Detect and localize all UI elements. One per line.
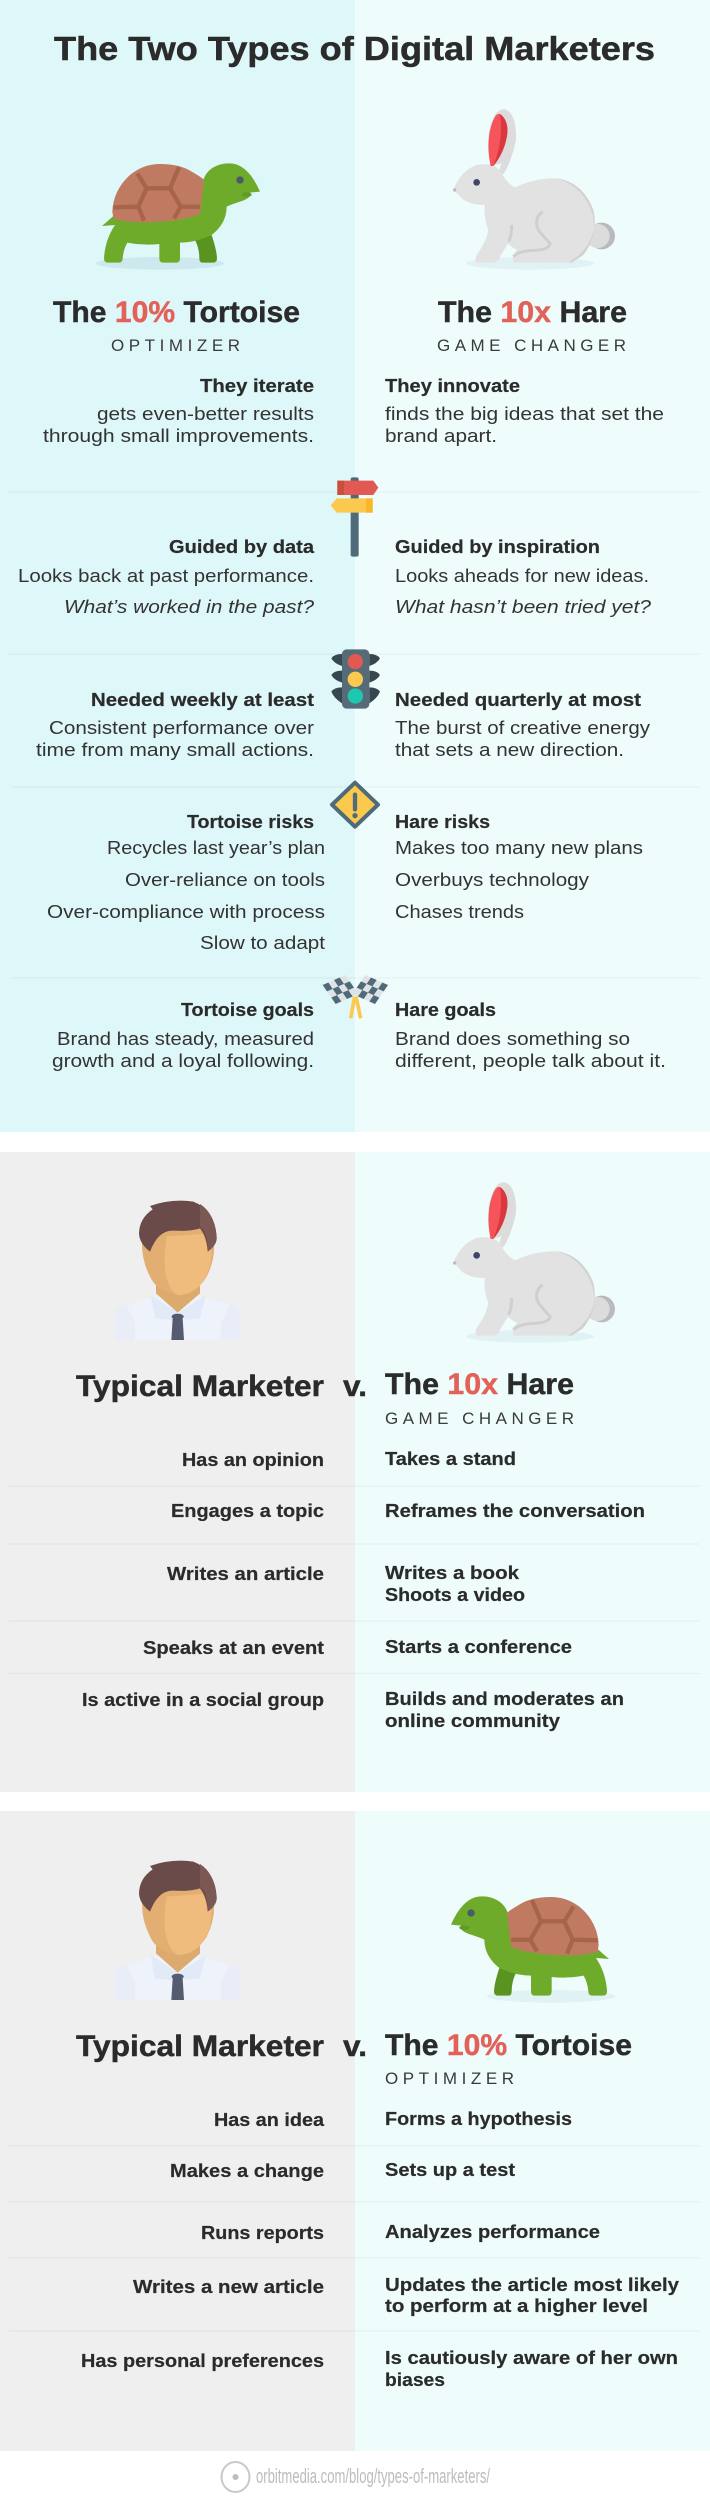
text block: hare goals: Brand does something so [395,1028,630,1049]
icon: hare [453,109,615,270]
text block: guided by inspiration: Guided by inspiration [395,536,600,557]
text block: they iterate: through small improvements. [43,425,314,446]
text block: they iterate: gets even-better results [97,403,314,424]
text block: they innovate [385,375,664,446]
heading: versus: v. [343,1370,367,1403]
list: hare actions: Builds and moderates an [385,1688,624,1709]
text block: needed weekly [36,689,314,760]
subheading: game changer: GAME CHANGER [385,1409,574,1428]
text block: tortoise risks [47,811,325,953]
text block: needed weekly: time from many small actions. [36,739,314,760]
text block: guided by data: Looks back at past performance. [18,565,314,586]
panel background [0,0,710,1132]
text block: tortoise goals: growth and a loyal following. [52,1050,314,1071]
icon: traffic light [331,649,380,709]
list: tortoise actions: Updates the article most likely [385,2274,680,2295]
text block: hare goals: different, people talk about it. [395,1050,666,1071]
list: hare actions: Reframes the conversation [385,1500,645,1521]
panel: tortoise vs hare [0,0,710,1132]
list: marketer actions: Speaks at an event [143,1637,324,1658]
text block: guided by inspiration: Looks aheads for new ideas. [395,565,649,586]
text block: hare goals [395,999,666,1071]
subheading: game changer: GAME CHANGER [437,336,626,355]
text block: hare risks: Makes too many new plans [395,837,643,858]
text block: needed quarterly [395,689,651,760]
text block: they innovate: finds the big ideas that set the [385,403,664,424]
text block: guided by data: What’s worked in the past? [64,596,315,617]
text block: hare risks: Overbuys technology [395,869,590,890]
text block: needed weekly: Consistent performance over [49,717,314,738]
heading: the 10% tortoise: The 10% Tortoise [53,296,300,329]
source text: orbitmedia.com/blog/types-of-marketers/ [256,2466,490,2488]
heading: typical marketer: Typical Marketer [76,2030,324,2063]
text block: tortoise goals [52,999,314,1071]
icon: checkered flags [323,975,388,1018]
text block: needed quarterly: that sets a new direction. [395,739,624,760]
text block: needed quarterly: The burst of creative energy [395,717,651,738]
text block: tortoise goals: Brand has steady, measured [57,1028,314,1049]
text block: needed weekly: Needed weekly at least [91,689,314,710]
panel background [0,1152,710,1792]
text block: tortoise goals: Tortoise goals [181,999,314,1020]
list: tortoise actions: Analyzes performance [385,2221,600,2242]
list: hare actions: Starts a conference [385,1636,572,1657]
icon: tortoise [451,1896,615,2003]
icon: marketer [115,1201,240,1340]
list: marketer actions [81,2109,325,2371]
heading: the 10% tortoise: The 10% Tortoise [385,2029,632,2062]
list: marketer actions: Has personal preferences [81,2350,324,2371]
panel background [0,1811,710,2451]
list: marketer actions [82,1449,324,1710]
icon: orbit logo [222,2462,250,2492]
list: hare actions: Takes a stand [385,1448,516,1469]
text block: needed quarterly: Needed quarterly at most [395,689,641,710]
text block: tortoise risks: Tortoise risks [187,811,314,832]
text block: hare risks: Chases trends [395,901,524,922]
text block: hare risks [395,811,643,922]
list: marketer actions: Has an opinion [182,1449,324,1470]
list: marketer actions: Has an idea [214,2109,325,2130]
heading: versus: v. [343,2030,367,2063]
text block: guided by inspiration: What hasn’t been tried yet? [395,596,652,617]
list: tortoise actions [385,2108,680,2390]
icon: hare [453,1182,615,1343]
list: marketer actions: Writes a new article [133,2276,324,2297]
heading: the 10x hare: The 10x Hare [385,1368,574,1401]
list: tortoise actions: biases [385,2369,445,2390]
icon: signpost [331,477,378,557]
text block: guided by data: Guided by data [169,536,315,557]
text block: guided by data [18,536,315,617]
list: tortoise actions: Forms a hypothesis [385,2108,572,2129]
subheading: optimizer: OPTIMIZER [111,336,240,355]
text block: tortoise risks: Over-compliance with process [47,901,325,922]
panel: typical marketer vs tortoise [0,1811,710,2451]
list: tortoise actions: Is cautiously aware of her own [385,2347,678,2368]
panel: typical marketer vs hare [0,1152,710,1792]
heading: the 10x hare: The 10x Hare [438,296,627,329]
text block: guided by inspiration [395,536,652,617]
list: marketer actions: Makes a change [170,2160,324,2181]
text block: hare goals: Hare goals [395,999,496,1020]
list: hare actions: online community [385,1710,561,1731]
text block: they innovate: They innovate [385,375,520,396]
text block: tortoise risks: Over-reliance on tools [125,869,325,890]
title: The Two Types of Digital Marketers [54,30,655,67]
list: tortoise actions: to perform at a higher level [385,2295,648,2316]
list: marketer actions: Engages a topic [171,1500,324,1521]
text block: they iterate [43,375,314,446]
list: marketer actions: Runs reports [201,2222,324,2243]
list: hare actions: Shoots a video [385,1584,525,1605]
list: marketer actions: Is active in a social group [82,1689,324,1710]
subheading: optimizer: OPTIMIZER [385,2069,514,2088]
text block: hare risks: Hare risks [395,811,490,832]
heading: typical marketer: Typical Marketer [76,1370,324,1403]
text block: tortoise risks: Slow to adapt [200,932,325,953]
text block: tortoise risks: Recycles last year’s plan [107,837,325,858]
text block: they iterate: They iterate [200,375,314,396]
footer: source url [222,2462,490,2492]
icon: marketer [115,1861,240,2000]
list: marketer actions: Writes an article [167,1563,324,1584]
text block: they innovate: brand apart. [385,425,497,446]
list: hare actions [385,1448,645,1731]
list: hare actions: Writes a book [385,1562,520,1583]
icon: warning sign [332,783,378,827]
list: tortoise actions: Sets up a test [385,2159,515,2180]
icon: tortoise [96,163,260,270]
